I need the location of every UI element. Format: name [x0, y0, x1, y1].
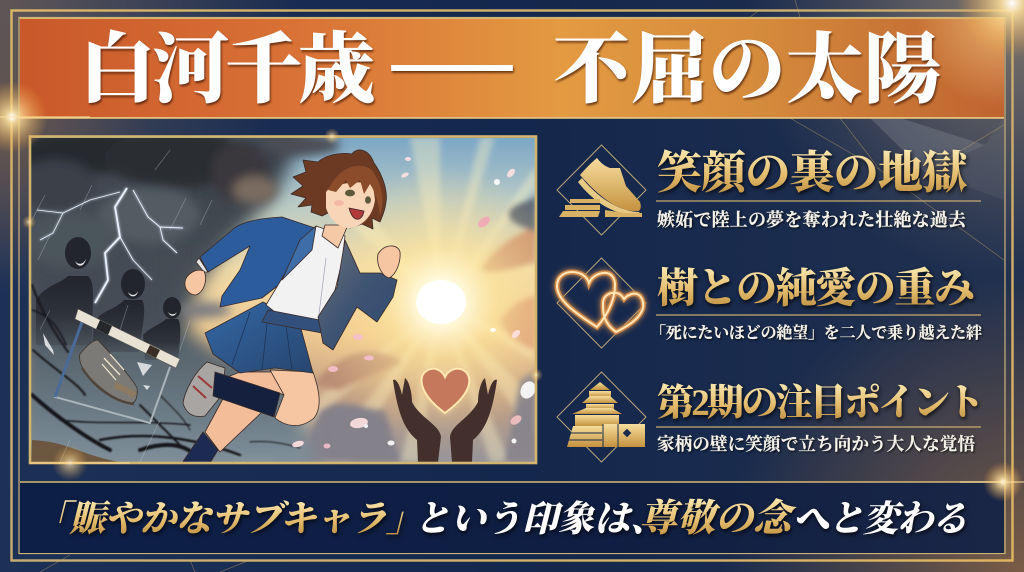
illustration runner: [182, 150, 400, 463]
subtext 1: 嫉妬で陸上の夢を奪われた壮絶な過去: [657, 209, 967, 230]
icon: linked hearts: [557, 258, 646, 348]
runner mouth: [349, 208, 364, 219]
runner face: [326, 182, 375, 228]
title text: phrase: 不屈の太陽: [553, 27, 941, 113]
illustration sun: [338, 179, 534, 423]
subtext 2: 「死にたいほどの絶望」を二人で乗り越えた絆: [650, 323, 983, 342]
illustration lightning: [37, 188, 183, 303]
item 3: season 2: [557, 372, 984, 462]
divider 3: [656, 426, 981, 428]
illustration sun rays: [300, 138, 535, 462]
illustration ground streaks: [32, 285, 300, 462]
title band: [20, 18, 1004, 119]
illustration panel: [28, 135, 538, 464]
illustration shadow figures: [36, 237, 181, 360]
bottom message band: [20, 482, 1004, 553]
bottom text: middle: という印象は、: [414, 499, 666, 539]
runner right jacket: [318, 240, 397, 350]
illustration frame: [30, 136, 536, 463]
illustration petals: [291, 157, 539, 448]
bottom text: quoted phrase: 「賑やかなサブキャラ」: [34, 499, 422, 539]
runner skirt: [205, 302, 313, 373]
illustration broken hurdle: [55, 309, 180, 423]
illustration sky: [180, 138, 535, 462]
runner lapel: [282, 226, 316, 280]
icon: shoe on broken steps: [557, 145, 646, 235]
heading 2: 樹との純愛の重み: [657, 265, 975, 311]
runner left arm: [185, 217, 315, 307]
title text: name: 白河千歳: [79, 27, 375, 113]
icon: castle and family crest box: [557, 372, 646, 462]
runner hair back: [291, 150, 386, 229]
divider 2: [656, 314, 981, 316]
illustration debris: [43, 333, 152, 390]
divider 1: [656, 200, 981, 202]
illustration heart in hands: [393, 369, 497, 462]
bottom text: ending: へと変わる: [793, 499, 968, 539]
item 1: smile hell: [557, 145, 981, 235]
illustration storm: [15, 128, 340, 470]
runner shirt: [262, 226, 345, 333]
runner fringe: [328, 166, 382, 216]
illustration fallen shoe: [80, 340, 137, 404]
item 2: pure love: [557, 258, 983, 348]
heading 3: 第2期の注目ポイント: [657, 382, 984, 424]
runner trailing foot: [183, 362, 280, 417]
heading 1: 笑顔の裏の地獄: [657, 148, 971, 198]
illustration clouds right: [300, 195, 536, 462]
runner neck: [322, 225, 348, 248]
runner fist: [378, 246, 400, 278]
bottom text: highlight: 尊敬の念: [639, 497, 797, 540]
runner back leg and sock: [182, 372, 285, 463]
runner eyes: [334, 190, 371, 206]
illustration rain: [32, 150, 212, 462]
subtext 3: 家柄の壁に笑顔で立ち向かう大人な覚悟: [657, 434, 976, 454]
runner front leg: [270, 370, 319, 426]
